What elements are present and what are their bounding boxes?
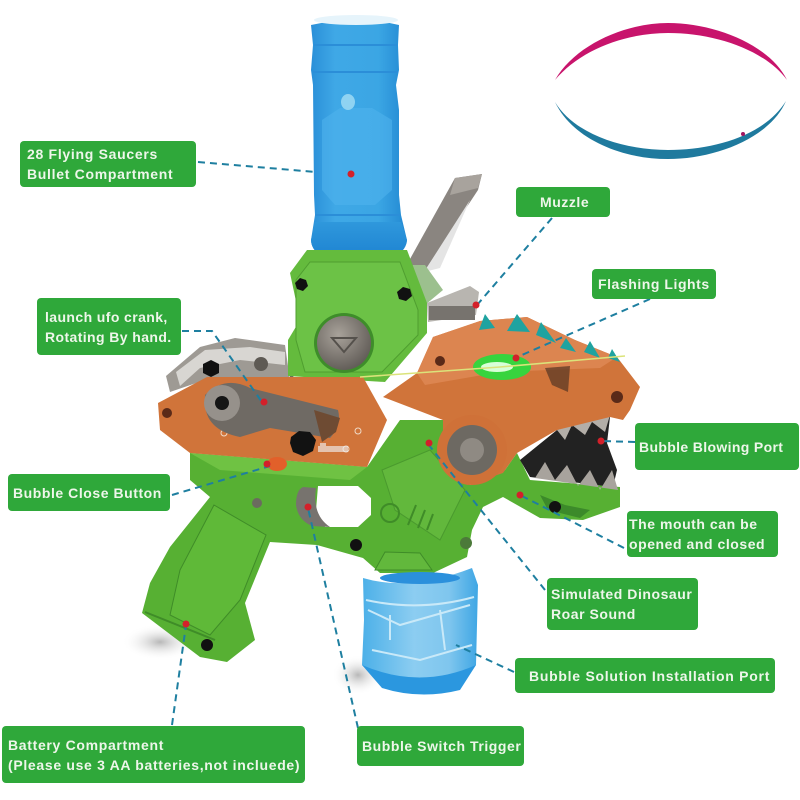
label: solution port [515,658,775,693]
grey muzzle block [405,265,479,322]
label: mouth opens: opened and closed [629,536,765,552]
label: battery compartment [2,726,305,783]
label: bubble blowing port [635,423,799,470]
tank: bubble solution [362,568,478,695]
label: muzzle [516,187,610,217]
label: mouth opens [627,511,778,557]
glowing green light [360,354,625,380]
label: muzzle: Muzzle [540,194,589,210]
grey rear slide [166,320,305,392]
label: bullet compartment: 28 Flying Saucers [27,146,158,162]
label: battery compartment: (Please use 3 AA batteries,not incluede) [8,756,300,772]
teal dinosaur spikes [479,314,620,362]
trigger guard opening [296,486,371,527]
label: flashing lights [592,269,716,299]
label: roar sound: Roar Sound [551,606,636,622]
green top housing [288,250,427,382]
label: launch crank: launch ufo crank, [45,308,168,324]
lower jaw detail [540,495,590,518]
orange button [267,457,287,471]
mouth interior [520,415,618,490]
label: bullet compartment: Bullet Compartment [27,166,173,182]
label: flashing lights: Flashing Lights [598,276,710,292]
bullet compartment tube [311,15,407,263]
label: roar sound: Simulated Dinosaur [551,586,692,602]
decorative ellipse: flying saucer ring [555,23,787,159]
crank handle [204,383,348,456]
label: bubble close button: Bubble Close Button [13,484,162,500]
label: switch trigger [357,726,524,766]
label: battery compartment: Battery Compartment [8,736,164,752]
label: switch trigger: Bubble Switch Trigger [362,738,521,754]
label: roar sound [547,578,698,630]
orange left body panel [158,377,387,467]
label: mouth opens: The mouth can be [629,516,758,532]
label: bullet compartment [20,141,196,187]
red markers [182,170,604,628]
green lower body and grip [142,420,620,662]
label: launch crank: Rotating By hand. [45,328,172,344]
cocked slide piece [405,174,482,272]
label: bubble close button [8,474,170,511]
label: solution port: Bubble Solution Installation Port [529,668,770,684]
label: bubble blowing port: Bubble Blowing Port [639,438,783,454]
orange dinosaur head [383,317,640,485]
shadows under grip and tank [122,624,384,695]
leader lines [172,162,650,728]
label: launch crank [37,298,181,355]
